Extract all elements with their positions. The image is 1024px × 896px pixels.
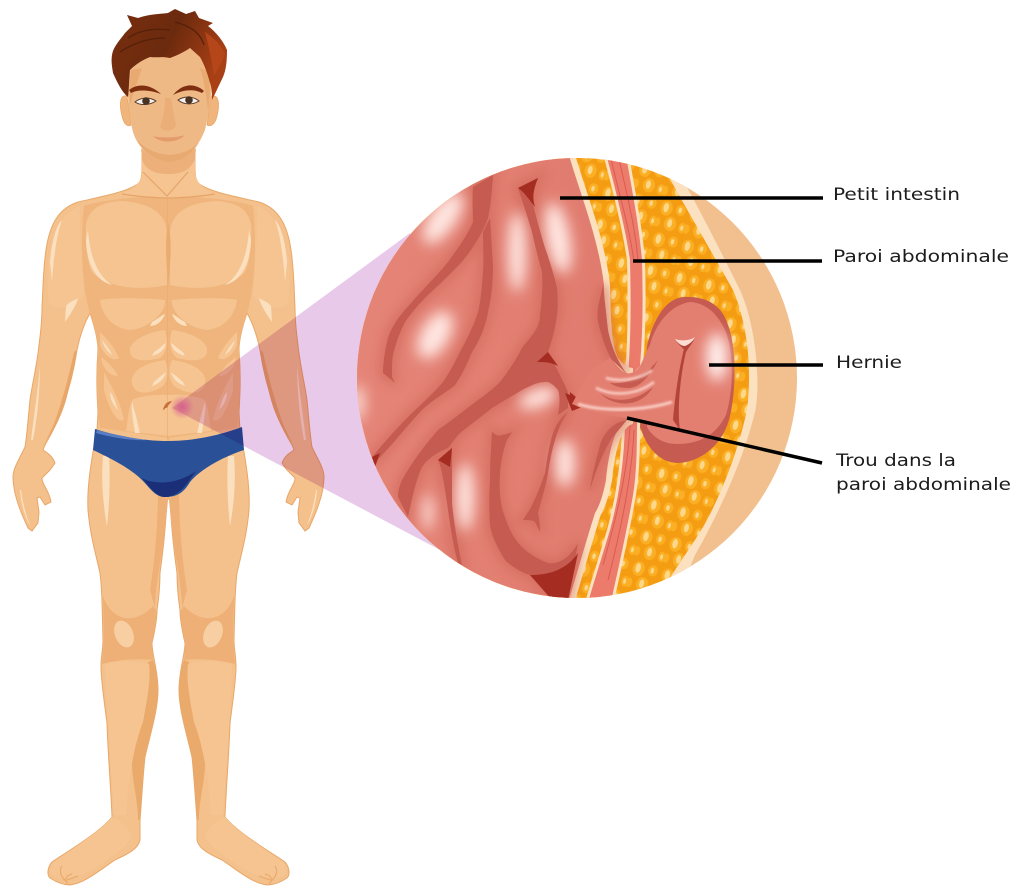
dividing crease [673,350,686,428]
groove shapes [372,175,627,597]
navel [163,401,172,410]
fat layer [357,158,750,598]
callout: Petit intestin: Petit intestin [833,185,960,205]
callout: Trou dans la paroi abdominale: paroi abdominale [836,475,1011,495]
mouth [153,135,185,142]
hernia fold tip [675,337,695,347]
band along lower wall [590,420,627,490]
toes [60,866,78,884]
muscle highlights [20,220,166,785]
abdominal muscles [100,298,169,436]
callout: Trou dans la paroi abdominale: Trou dans la [835,451,956,471]
hair [112,9,227,100]
shoulder [48,206,84,308]
band along upper wall [597,285,627,374]
eyebrows [129,85,204,95]
skin layer [350,150,810,610]
chest shadow [82,196,169,438]
neck tendons and clavicle [122,172,215,198]
knee cap [110,618,138,650]
inner lower groove [523,412,568,532]
foot [51,817,132,879]
neck folds [610,360,658,388]
hernia neck [572,346,650,420]
U-shaped lower groove [489,432,578,597]
face [127,46,212,162]
left half of the body [13,150,169,885]
figure: human body [13,9,324,885]
briefs waistband [96,430,148,440]
long central groove [398,178,568,517]
intestine folds [352,175,627,600]
magnified circle [357,158,797,598]
dark red recesses [372,178,580,598]
hernia outer rim [640,297,735,463]
face shading [130,68,210,162]
hernia highlight [706,333,728,381]
calf shadow [132,660,158,820]
knee shadow [102,596,157,664]
briefs crotch shading [142,471,196,497]
neck [124,145,212,198]
hernia spot on body [170,395,194,419]
highlights [352,186,576,531]
magnifier cone [172,233,440,550]
groove soft shading [372,175,627,597]
mirrored right half of the body [168,150,324,885]
hernia body [647,302,732,444]
hair strands [120,22,204,52]
pectoral muscle [86,201,167,288]
callout: Hernie: Hernie [836,353,902,373]
thin low-left groove [438,448,462,565]
neck shadow [141,148,196,174]
sternum line [166,222,171,285]
ears [120,96,219,126]
briefs [93,427,244,497]
second groove [372,218,493,462]
callout: Trou dans la paroi abdominale [627,418,1011,495]
eyes [135,96,199,105]
abdominal wall muscle top [604,160,646,372]
inner thigh shadow [150,490,168,612]
cream subcutaneous edge [670,179,758,577]
callout: Paroi abdominale: Paroi abdominale [833,247,1009,267]
lower leg [105,661,150,815]
hernia sac [572,297,735,463]
forearm shadow [44,350,77,448]
nose [160,98,176,131]
intestine cavity [340,140,627,610]
abdominal wall muscle bottom [586,421,640,598]
far-left loop groove [383,175,493,383]
hair highlights [205,32,225,76]
